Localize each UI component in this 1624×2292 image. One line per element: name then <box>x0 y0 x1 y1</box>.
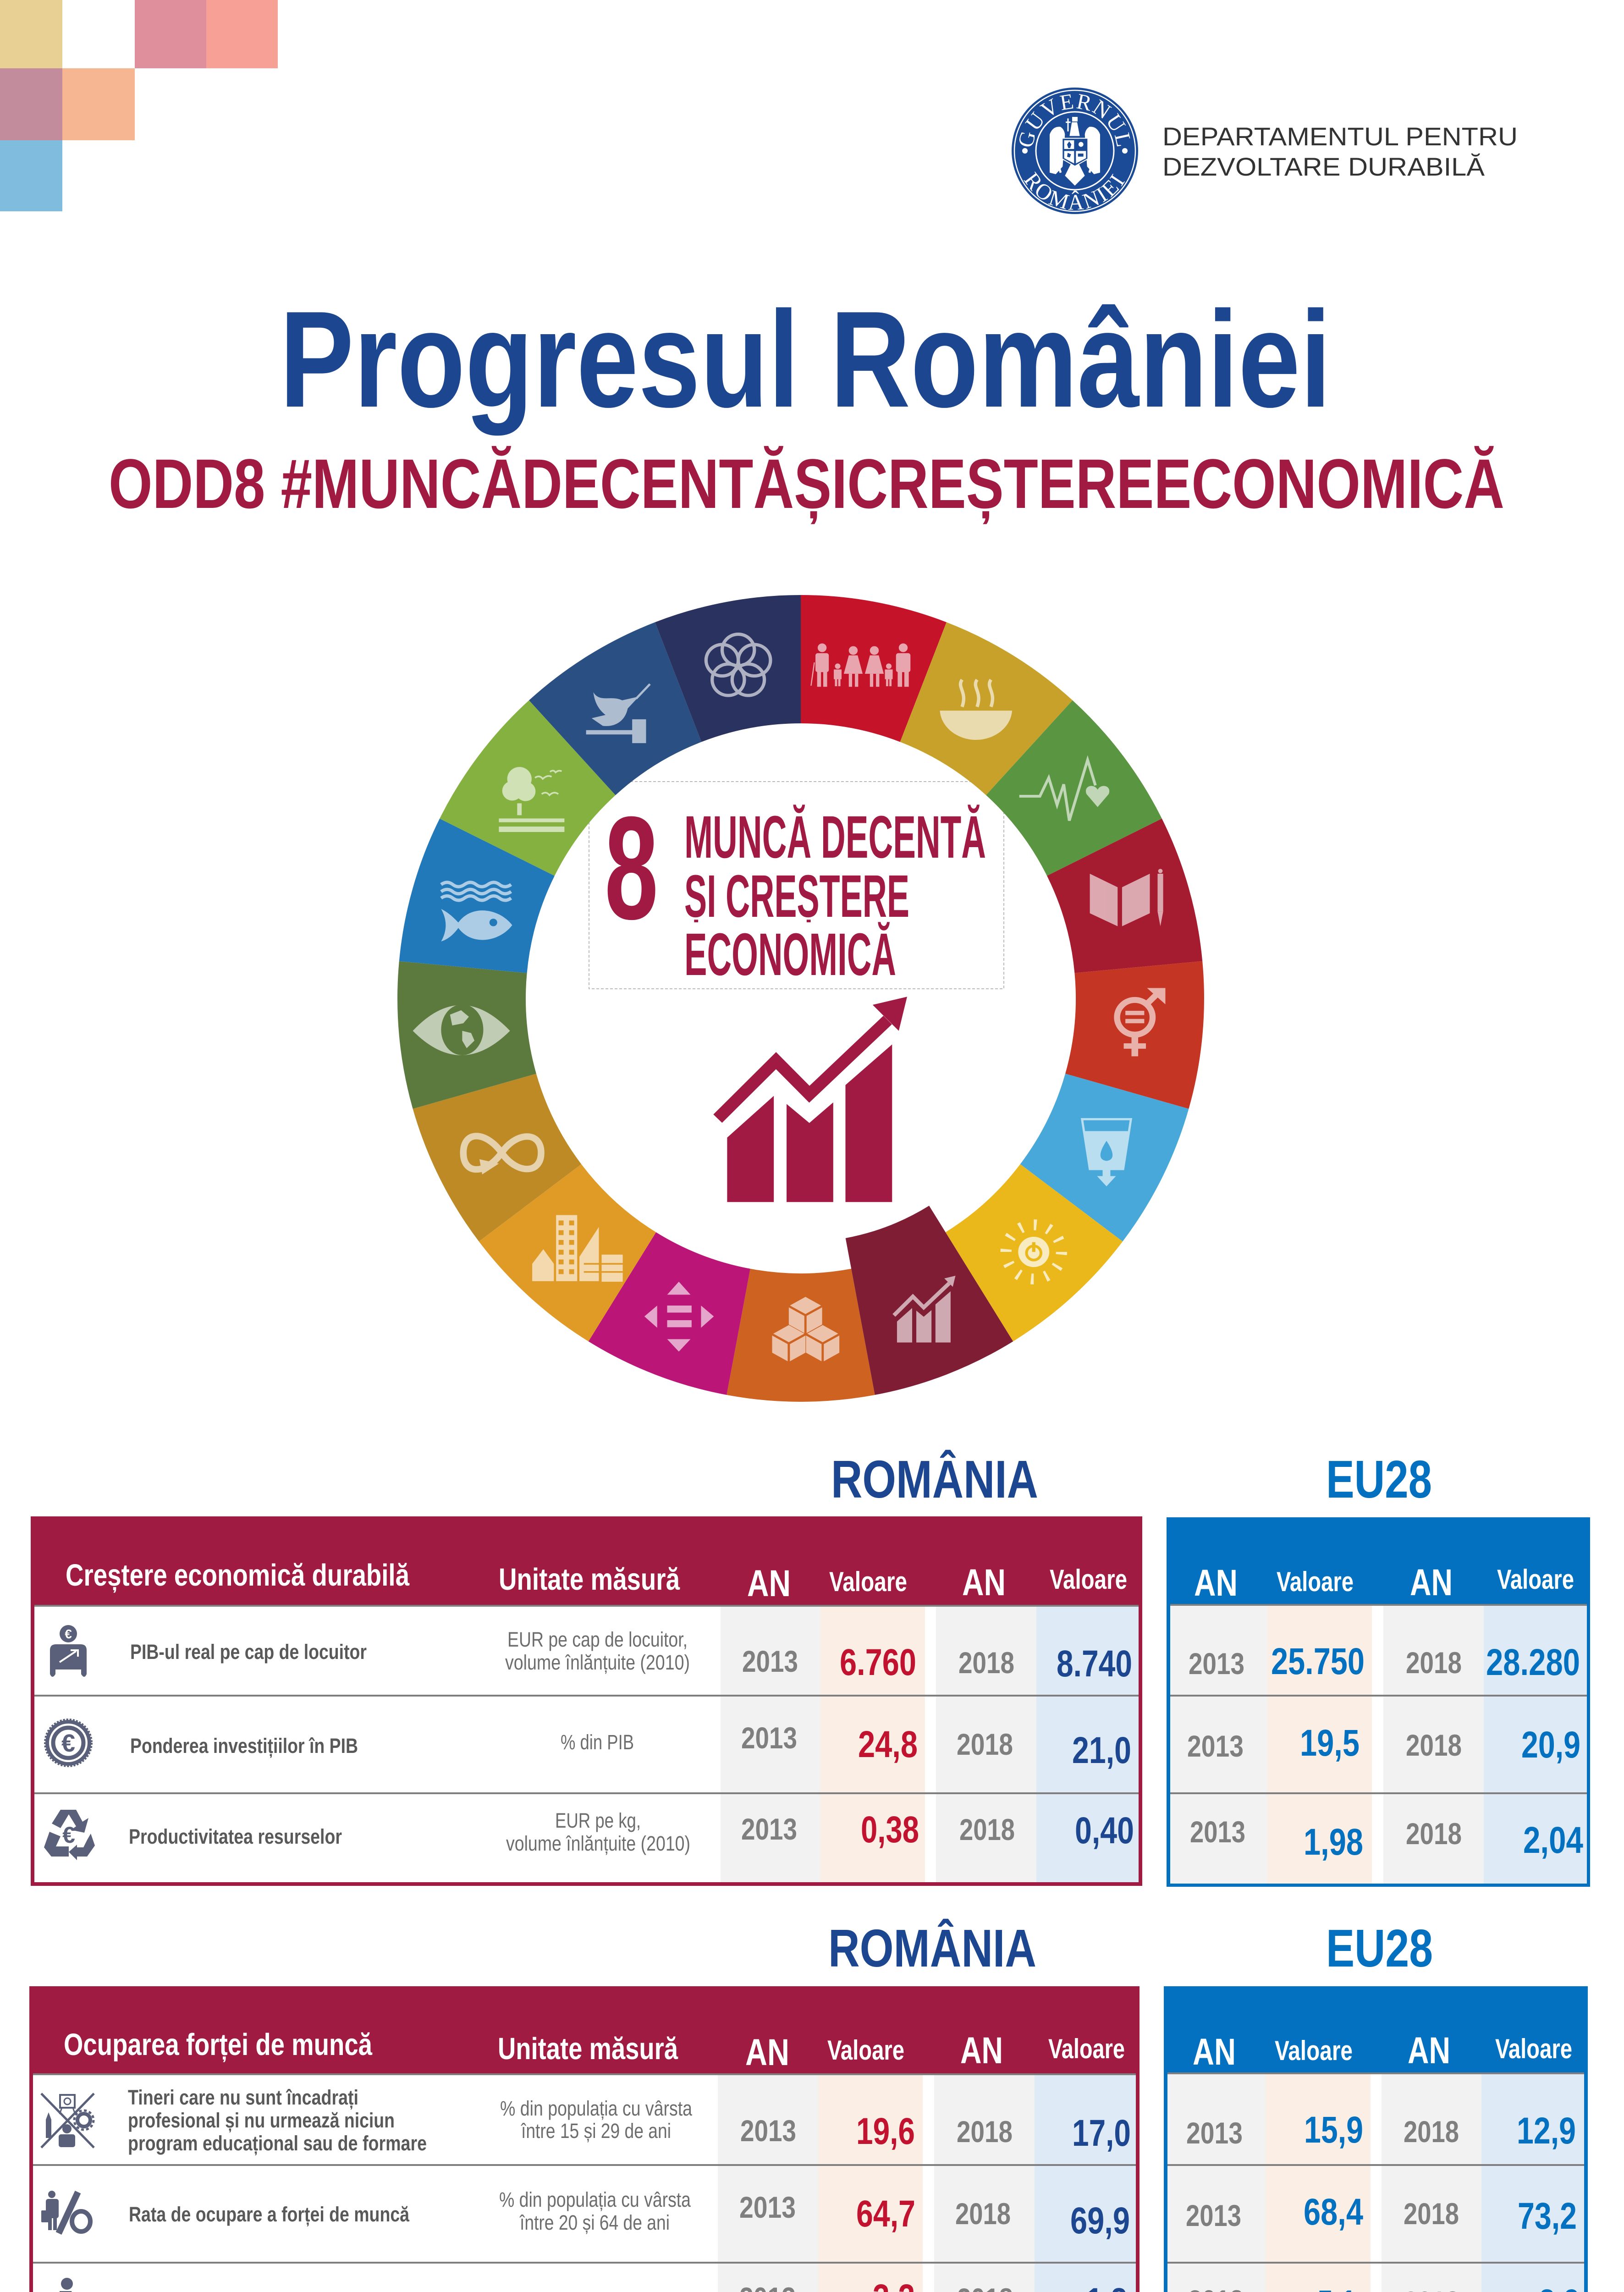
table header: Valoare <box>829 1566 907 1597</box>
icon: heartbeat (goal 3) <box>1019 760 1109 821</box>
table header: Valoare <box>1048 2033 1125 2064</box>
table header: Valoare <box>1277 1566 1354 1597</box>
goal 8 title box <box>589 782 1004 989</box>
row: Rata de ocupare a forței de muncă: 64,7 <box>856 2193 915 2235</box>
logo text: Departamentul pentru Dezvoltare Durabilă: DEZVOLTARE DURABILĂ <box>1162 152 1485 181</box>
row: PIB-ul real pe cap de locuitor: EUR pe cap de locuitor, <box>507 1628 688 1651</box>
row values: tineri: 2018 <box>1404 2115 1459 2149</box>
row: Productivitatea resurselor: Productivitatea resurselor <box>129 1825 342 1848</box>
table header: Unitate măsură <box>499 1562 680 1597</box>
row: Rata de ocupare a forței de muncă: 2018 <box>955 2197 1011 2231</box>
row: Productivitatea resurselor: volume înlănțuite (2010) <box>506 1832 690 1855</box>
icon: worker and percent <box>41 2191 90 2233</box>
row: Tineri care nu sunt încadrați: % din populația cu vârsta <box>500 2097 693 2120</box>
row: PIB-ul real pe cap de locuitor: 8.740 <box>1057 1643 1132 1685</box>
row: PIB-ul real pe cap de locuitor: volume înlănțuite (2010) <box>505 1651 690 1674</box>
row: Productivitatea resurselor: 2018 <box>959 1813 1015 1846</box>
goal 8 title box: ȘI CREȘTERE <box>684 862 909 931</box>
row: Tineri care nu sunt încadrați: 19,6 <box>856 2110 915 2152</box>
row values: investiții: 2018 <box>1406 1728 1462 1762</box>
icon: person with euro: € <box>65 1627 72 1641</box>
row: PIB-ul real pe cap de locuitor: 6.760 <box>840 1642 916 1683</box>
icon: seated person with briefcase <box>47 2278 86 2292</box>
table header: Creștere economică durabilă <box>66 1558 410 1593</box>
row values: investiții: 19,5 <box>1300 1722 1360 1764</box>
row: Rata de ocupare a forței de muncă: 69,9 <box>1070 2200 1130 2242</box>
row: Ponderea investițiilor în PIB: % din PIB <box>561 1730 634 1754</box>
row: Rata de ocupare a forței de muncă: % din populația cu vârsta <box>499 2188 691 2211</box>
panel: Creștere economică durabilă, EU28 <box>1167 1517 1590 1887</box>
row: Productivitatea resurselor <box>44 1809 1134 1860</box>
row values: productivitate: 1,98 <box>1304 1821 1363 1863</box>
icon: city (goal 11) <box>532 1215 623 1282</box>
icon: book and pencil (goal 4) <box>1090 869 1163 926</box>
row: Rata de ocupare a forței de muncă: Rata de ocupare a forței de muncă <box>129 2203 410 2226</box>
icon: person with euro <box>50 1625 87 1677</box>
wheel ring segments <box>397 595 1204 1402</box>
logo text: Departamentul pentru Dezvoltare Durabilă: DEPARTAMENTUL PENTRU <box>1162 122 1518 151</box>
logo: Guvernul României seal: ROMÂNIEI <box>1019 168 1130 215</box>
row values: tineri: 15,9 <box>1304 2109 1363 2151</box>
row values: productivitate: 2013 <box>1190 1815 1245 1849</box>
row: PIB-ul real pe cap de locuitor: 2018 <box>958 1646 1014 1680</box>
heading: EU28, table 1: EU28 <box>1326 1449 1432 1509</box>
icon: recycling euro <box>44 1810 95 1860</box>
row: Rata de ocupare a forței de muncă: între 20 și 64 de ani <box>519 2211 670 2234</box>
row values: productivitate: 2018 <box>1406 1817 1462 1851</box>
row: Ponderea investițiilor în PIB: 2013 <box>741 1721 797 1755</box>
title: Progresul României <box>280 283 1331 436</box>
goal 8 title box: MUNCĂ DECENTĂ <box>684 803 986 871</box>
decorative corner squares <box>0 0 278 211</box>
panel: Ocuparea forței de muncă, România <box>29 1986 1140 2292</box>
row: Tineri care nu sunt încadrați <box>41 2086 1131 2155</box>
table header: Valoare <box>1495 2033 1572 2064</box>
table header: AN <box>1194 1562 1238 1604</box>
icon: crossed education and work <box>41 2094 94 2148</box>
row: Ponderea investițiilor în PIB: 21,0 <box>1072 1730 1131 1771</box>
icon: sun and power (goal 7) <box>1006 1225 1062 1279</box>
row values: tineri <box>1186 2109 1576 2152</box>
table header: Valoare <box>1275 2035 1353 2066</box>
row values: productivitate: 2,04 <box>1523 1819 1583 1861</box>
row values: ocupare: 73,2 <box>1518 2195 1577 2237</box>
row: Tineri care nu sunt încadrați: 2013 <box>740 2114 796 2148</box>
icon: growth chart small (goal 8) <box>894 1276 956 1343</box>
row: Rata de ocupare a forței de muncă <box>41 2188 1130 2242</box>
row: Productivitatea resurselor: EUR pe kg, <box>555 1809 641 1832</box>
row values: investiții: 2013 <box>1187 1729 1244 1763</box>
row: Tineri care nu sunt încadrați: program educațional sau de formare <box>128 2132 427 2155</box>
row values: ocupare: 68,4 <box>1304 2191 1363 2233</box>
panel: Creștere economică durabilă, România <box>31 1516 1142 1886</box>
row: Productivitatea resurselor: 0,38 <box>861 1809 919 1851</box>
row: Productivitatea resurselor: 2013 <box>741 1812 797 1846</box>
wheel icons <box>413 634 1165 1362</box>
table header: AN <box>1408 2030 1450 2072</box>
icon: tree and birds (goal 15) <box>499 767 564 832</box>
table header <box>64 2028 1125 2073</box>
row: Rata șomajului de lunga durată <box>47 2277 1127 2292</box>
row values: tineri: 12,9 <box>1517 2110 1576 2152</box>
icon: eye with globe (goal 13) <box>413 1004 510 1055</box>
table header <box>1193 2030 1572 2073</box>
icon: large growth chart <box>718 997 907 1202</box>
row: Tineri care nu sunt încadrați: profesional și nu urmează niciun <box>128 2109 395 2132</box>
row: Ponderea investițiilor în PIB <box>45 1720 1131 1771</box>
goal 8 title box: ECONOMICĂ <box>684 920 896 988</box>
row values: PIB: 2013 <box>1189 1647 1244 1680</box>
icon: recycling euro: € <box>62 1822 75 1848</box>
icon: fish and waves (goal 14) <box>441 882 512 942</box>
row: PIB-ul real pe cap de locuitor <box>50 1625 1132 1685</box>
row values: PIB: 25.750 <box>1271 1641 1365 1682</box>
SDG wheel with goal 8 <box>397 595 1204 1402</box>
row: Ponderea investițiilor în PIB: 24,8 <box>858 1724 918 1765</box>
heading: ROMÂNIA, table 2: ROMÂNIA <box>828 1918 1036 1978</box>
icon: family (goal 1) <box>811 644 910 687</box>
row: Ponderea investițiilor în PIB: Ponderea investițiilor în PIB <box>130 1734 358 1758</box>
row values: ocupare: 2018 <box>1404 2197 1459 2231</box>
table header: AN <box>960 2030 1003 2072</box>
table header: Unitate măsură <box>498 2032 678 2066</box>
table header <box>1194 1562 1574 1604</box>
row: Ponderea investițiilor în PIB: 2018 <box>957 1727 1013 1761</box>
logo text: Departamentul pentru Dezvoltare Durabilă <box>1162 122 1518 181</box>
table header: AN <box>745 2032 789 2073</box>
row: Rata de ocupare a forței de muncă: 2013 <box>739 2190 796 2224</box>
row: PIB-ul real pe cap de locuitor: 2013 <box>742 1644 798 1678</box>
row values: tineri: 2013 <box>1186 2116 1243 2150</box>
icon: dove and gavel (goal 16) <box>586 684 650 743</box>
row values: PIB <box>1189 1641 1580 1683</box>
row: Tineri care nu sunt încadrați: Tineri care nu sunt încadrați <box>128 2086 358 2109</box>
row: PIB-ul real pe cap de locuitor: PIB-ul real pe cap de locuitor <box>130 1640 367 1664</box>
icon: arrows (goal 10) <box>644 1282 714 1352</box>
panel: Ocuparea forței de muncă, EU28 <box>1164 1986 1588 2292</box>
icon: euro coin: € <box>61 1730 75 1757</box>
row values: productivitate <box>1190 1815 1583 1863</box>
row values: PIB: 2018 <box>1406 1646 1462 1680</box>
row: Tineri care nu sunt încadrați: 2018 <box>957 2115 1013 2149</box>
row values: ocupare <box>1186 2191 1577 2237</box>
row: Productivitatea resurselor: 0,40 <box>1075 1810 1134 1851</box>
logo: Guvernul României seal <box>1012 88 1138 215</box>
icon: gender equality (goal 5) <box>1117 988 1165 1056</box>
table header: Valoare <box>1497 1564 1574 1595</box>
row values: PIB: 28.280 <box>1486 1642 1580 1683</box>
table header: AN <box>962 1562 1006 1603</box>
row values: investiții: 20,9 <box>1521 1724 1580 1766</box>
table header: AN <box>1410 1562 1453 1603</box>
icon: bowl (goal 2) <box>940 680 1012 740</box>
heading: ROMÂNIA, table 1: ROMÂNIA <box>831 1449 1038 1509</box>
icon: euro coin <box>45 1720 91 1766</box>
table header: Valoare <box>827 2035 904 2066</box>
table header: AN <box>1193 2031 1236 2073</box>
table header <box>66 1558 1127 1604</box>
eagle with shield <box>1050 117 1100 186</box>
icon: infinity loop (goal 12) <box>463 1136 541 1174</box>
icon: partnership rings (goal 17) <box>706 634 771 695</box>
heading: EU28, table 2: EU28 <box>1326 1918 1433 1978</box>
table header: AN <box>747 1563 791 1604</box>
table header: Ocuparea forței de muncă <box>64 2028 373 2062</box>
logo: Guvernul României seal: GUVERNUL <box>1013 89 1136 150</box>
table header: Valoare <box>1050 1564 1127 1595</box>
row: Tineri care nu sunt încadrați: între 15 și 29 de ani <box>521 2119 671 2143</box>
row values: șomaj <box>1188 2282 1580 2292</box>
row values: ocupare: 2013 <box>1186 2198 1241 2232</box>
row values: investiții <box>1187 1722 1580 1766</box>
icon: cubes (goal 9) <box>772 1297 839 1362</box>
row: Tineri care nu sunt încadrați: 17,0 <box>1072 2112 1131 2154</box>
icon: water glass (goal 6) <box>1082 1119 1131 1186</box>
goal 8 title box: 8 <box>605 786 658 950</box>
